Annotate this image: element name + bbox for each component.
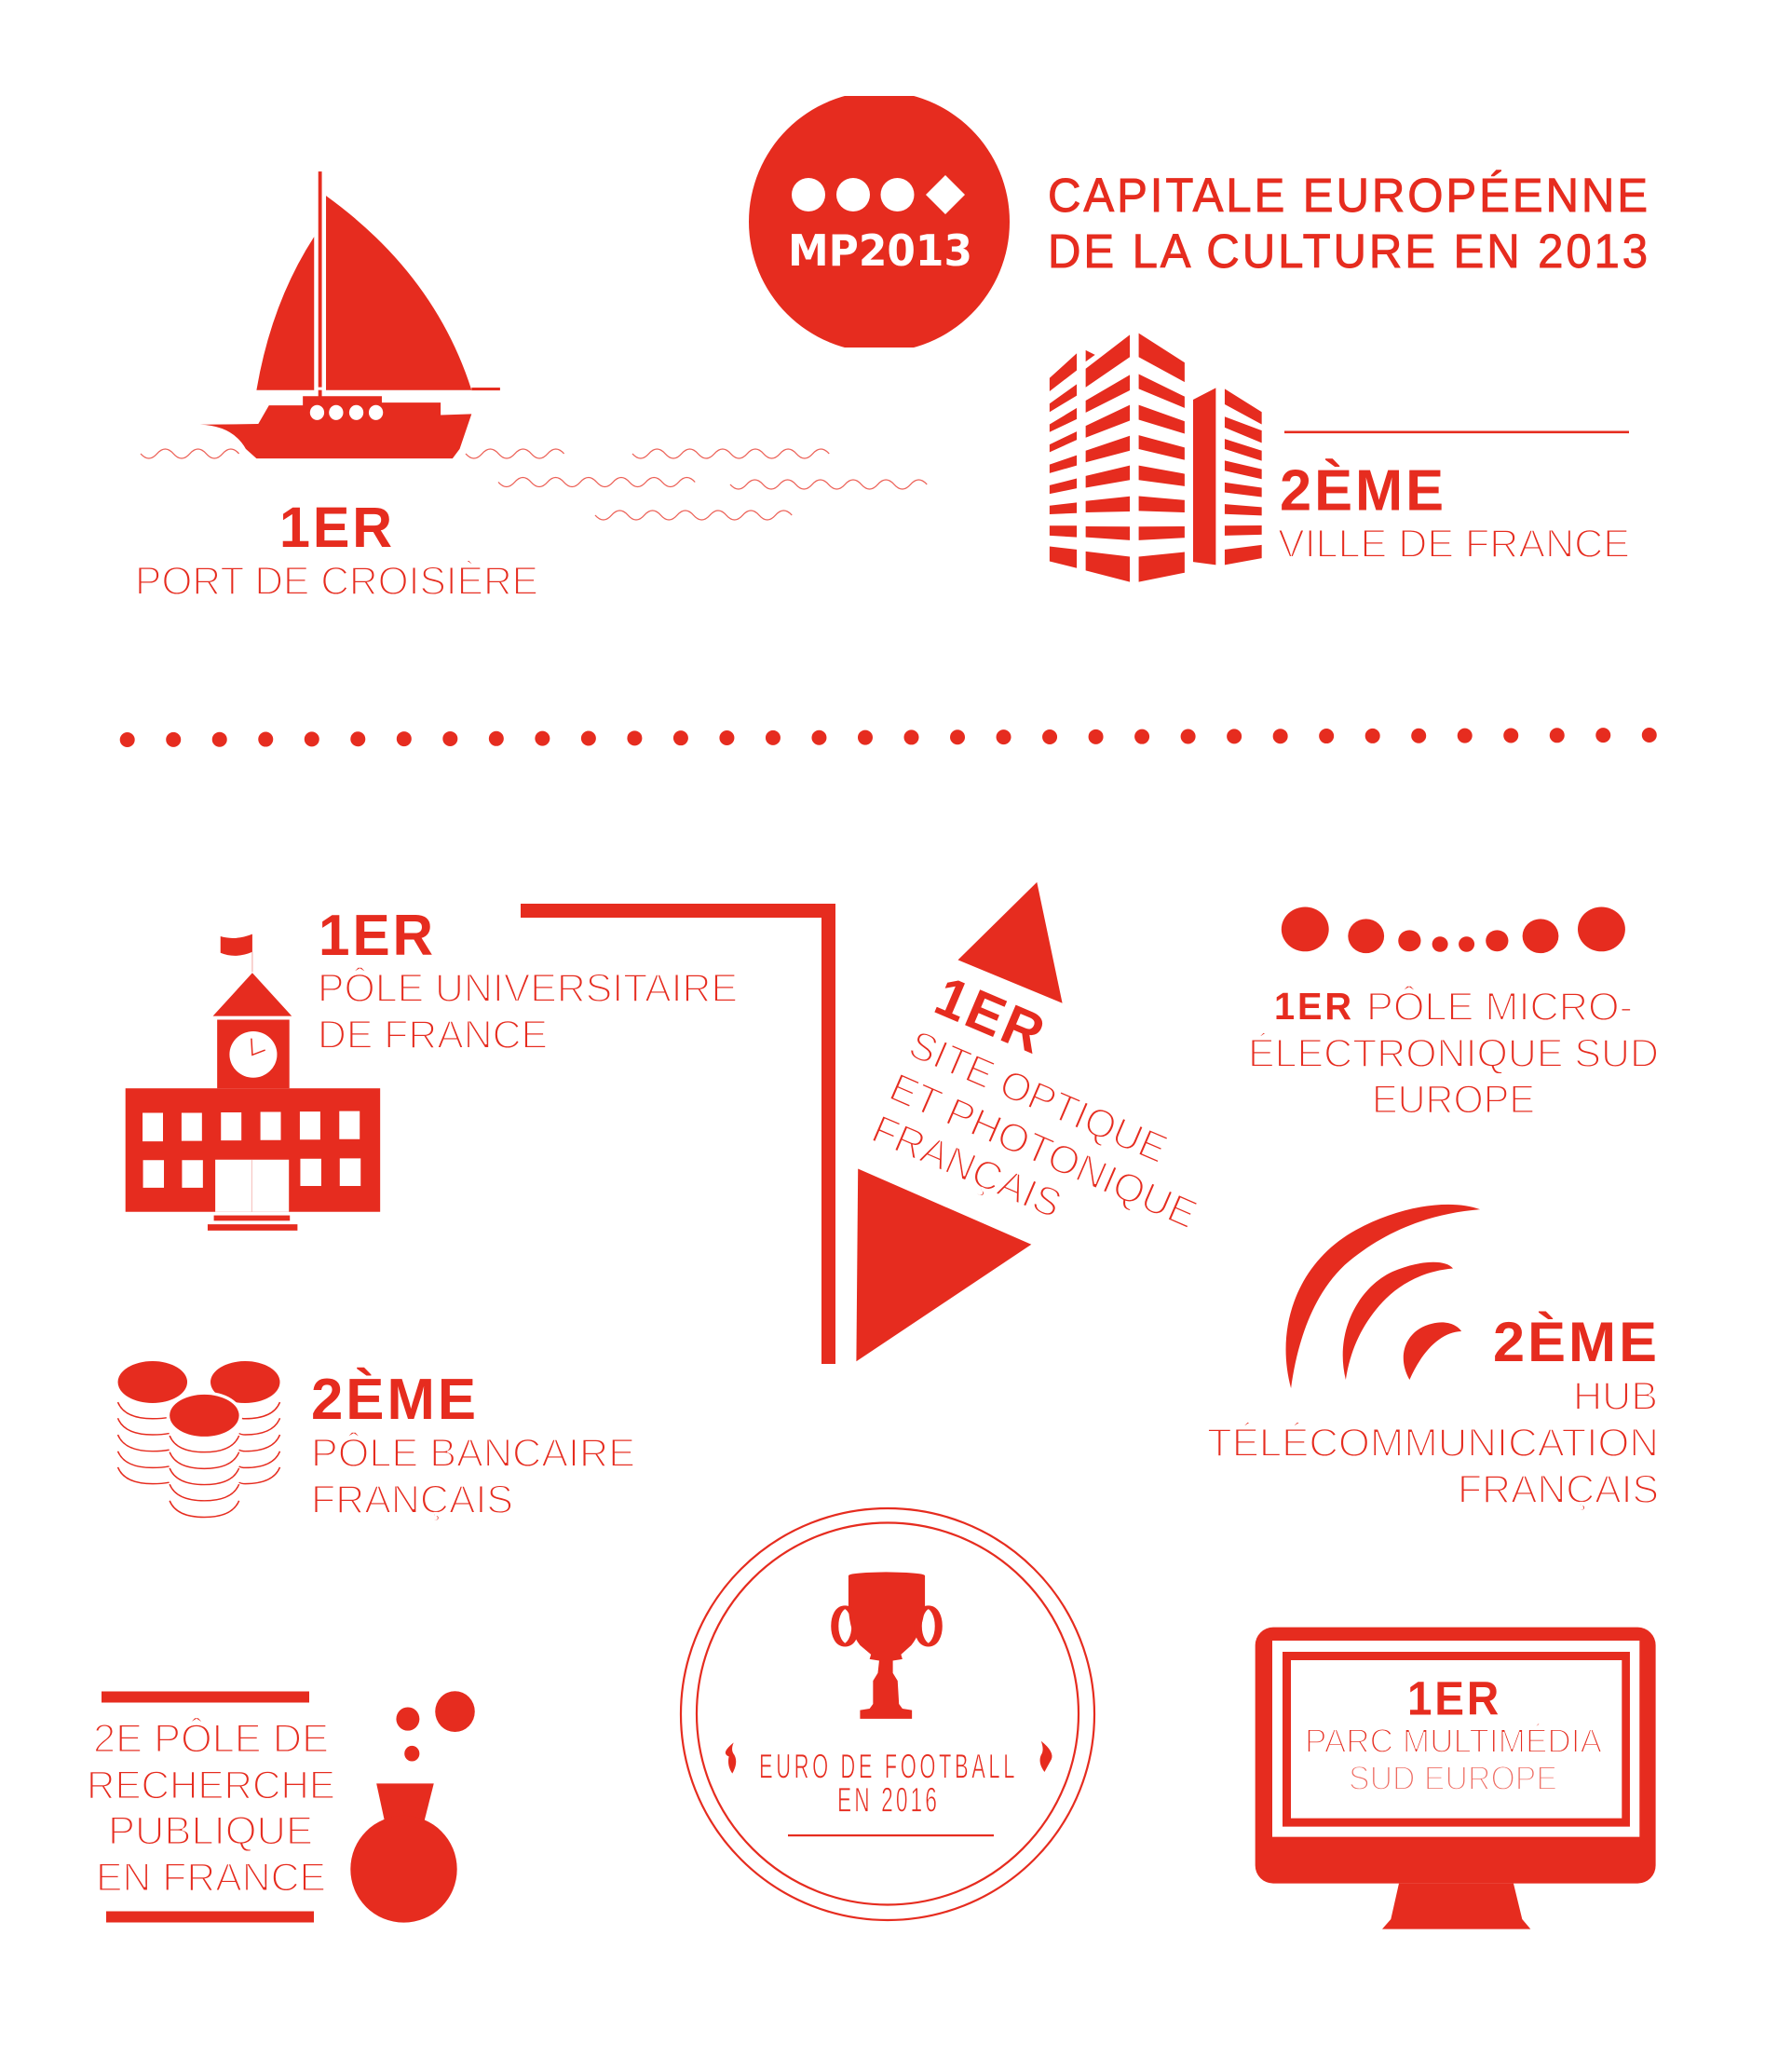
panel: site optique: [856, 882, 1203, 1361]
panel: pôle universitaire: [126, 904, 738, 1231]
text: port de croisière: PORT DE CROISIÈRE: [135, 559, 538, 604]
text: site optique et photonique français: ET PHOTONIQUE: [883, 1065, 1203, 1237]
text: 2e pôle de recherche publique en france: RECHERCHE: [87, 1763, 335, 1807]
text: parc multimédia sud europe: [1305, 1722, 1602, 1797]
icon: coin stacks: [118, 1361, 280, 1518]
heading: capitale européenne de la culture: CAPITALE EUROPÉENNE: [1048, 169, 1650, 222]
panel: euro de football: [681, 1508, 1094, 1920]
text: pôle bancaire français: [311, 1431, 635, 1522]
text: hub télécommunication français: TÉLÉCOMMUNICATION: [1207, 1421, 1659, 1465]
text: 1er pôle micro-électronique sud europe: [1248, 985, 1659, 1122]
icon: computer monitor: [1256, 1628, 1656, 1929]
text: 1er pôle micro-électronique sud europe: ÉLECTRONIQUE SUD: [1248, 1031, 1659, 1076]
icon: buildings: [1050, 334, 1262, 582]
text: site optique et photonique français: FRANÇAIS: [865, 1107, 1068, 1227]
icon: flask with bubbles: [350, 1691, 475, 1923]
frame: corner bracket: [521, 904, 835, 1364]
panel: hub télécommunication: [1207, 1205, 1660, 1512]
icon: university building: [126, 934, 380, 1231]
heading: capitale européenne de la culture: [1048, 169, 1650, 278]
text: 1er pôle micro-électronique sud europe: 1ER: [1274, 985, 1354, 1028]
text: ville de france: VILLE DE FRANCE: [1278, 522, 1630, 566]
text: 2e pôle de recherche publique en france: [87, 1692, 335, 1923]
text: euro de football en 2016: [759, 1748, 1018, 1819]
icon: signal arcs: [1286, 1205, 1480, 1388]
panel: pôle bancaire: [118, 1361, 635, 1522]
heading: 1er: 1ER: [1407, 1671, 1501, 1725]
text: site optique et photonique français: SITE OPTIQUE: [903, 1022, 1174, 1172]
heading: 1er: 1ER: [279, 496, 395, 559]
badge: double ring: [681, 1508, 1094, 1920]
text: 2e pôle de recherche publique en france: PUBLIQUE: [108, 1809, 313, 1854]
icon: trophy: [726, 1572, 1052, 1774]
text: 1er pôle micro-électronique sud europe: PÔLE MICRO-: [1366, 985, 1633, 1029]
text: euro de football en 2016: EN 2016: [837, 1781, 940, 1819]
text: pôle bancaire français: PÔLE BANCAIRE: [311, 1431, 635, 1476]
icon: sailing boat: [200, 171, 500, 458]
heading: 2ème: 2ÈME: [311, 1368, 479, 1432]
heading: 2ème: 2ÈME: [1493, 1311, 1660, 1373]
panel: parc multimédia: [1256, 1628, 1656, 1929]
text: euro de football en 2016: EURO DE FOOTBALL: [759, 1748, 1018, 1785]
icon: top triangle: [957, 882, 1063, 1003]
text: 2e pôle de recherche publique en france: EN FRANCE: [96, 1855, 326, 1900]
heading: 1er: 1ER: [319, 904, 436, 968]
icon: bottom triangle: [856, 1168, 1031, 1361]
text: 1er pôle micro-électronique sud europe: EUROPE: [1372, 1077, 1535, 1122]
text: parc multimédia sud europe: PARC MULTIMÉDIA: [1305, 1722, 1602, 1760]
text: 2e pôle de recherche publique en france: 2E PÔLE DE: [93, 1716, 329, 1761]
panel: pôle micro-électronique: [1248, 907, 1659, 1122]
text: pôle universitaire de france: DE FRANCE: [318, 1013, 548, 1057]
text: pôle universitaire de france: [318, 966, 738, 1057]
heading: 1er rotated: 1ER: [927, 964, 1055, 1067]
icon: waves: [141, 449, 927, 520]
text: hub télécommunication français: [1207, 1374, 1659, 1512]
text: hub télécommunication français: FRANÇAIS: [1458, 1467, 1659, 1512]
icon: shrinking dots: [1282, 907, 1625, 953]
panel: cruise port: [135, 171, 927, 604]
text: pôle bancaire français: FRANÇAIS: [311, 1478, 513, 1522]
panel: 2ème ville: [1050, 334, 1630, 582]
heading: capitale européenne de la culture: DE LA CULTURE EN 2013: [1048, 225, 1650, 278]
panel: recherche publique: [87, 1691, 475, 1923]
heading: 2ème: 2ÈME: [1280, 458, 1446, 524]
text: hub télécommunication français: HUB: [1573, 1374, 1658, 1419]
icon: MP2013 logo: MP2013: [788, 225, 972, 276]
icon: MP2013 logo: [749, 91, 1010, 352]
text: parc multimédia sud europe: SUD EUROPE: [1349, 1759, 1557, 1797]
text: pôle universitaire de france: PÔLE UNIVERSITAIRE: [318, 966, 738, 1011]
panel: capitale européenne: [749, 91, 1650, 352]
